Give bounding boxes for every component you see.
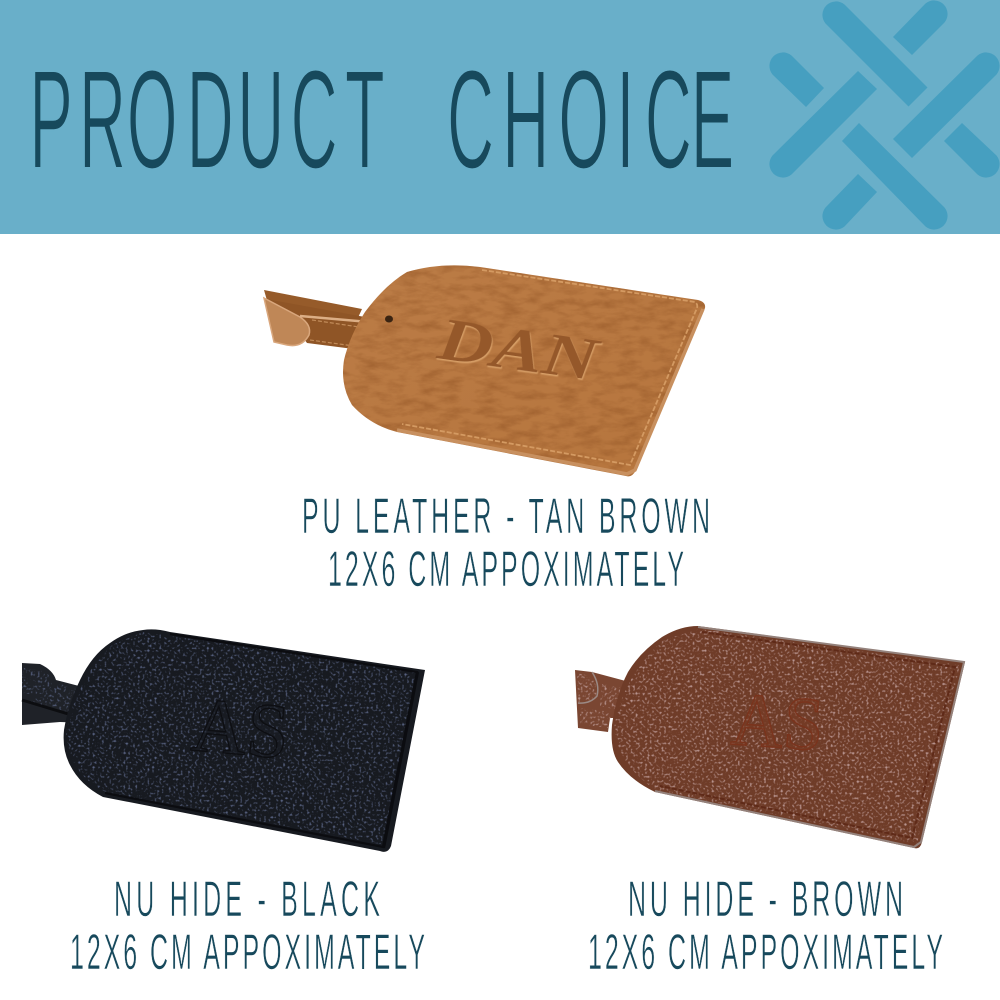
embossed initials AS: AS bbox=[729, 677, 826, 767]
strap hole bbox=[385, 316, 393, 322]
caption: PU leather bbox=[302, 489, 710, 597]
strap of black tag bbox=[22, 663, 102, 725]
caption: PU leather: PU LEATHER - TAN BROWN bbox=[302, 489, 710, 544]
caption: Nu Hide black bbox=[70, 872, 425, 980]
caption: Nu Hide brown: NU HIDE - BROWN bbox=[628, 872, 903, 927]
brown tag rim and stitching bbox=[655, 627, 964, 847]
panel: Nu Hide black tag bbox=[22, 629, 425, 852]
embossed initials DAN: DAN bbox=[433, 305, 605, 394]
caption: Nu Hide brown: 12X6 CM APPOXIMATELY bbox=[588, 925, 943, 980]
caption: Nu Hide brown bbox=[588, 872, 943, 980]
brown tag body bbox=[612, 626, 965, 848]
header banner bbox=[0, 0, 1000, 234]
title: PRODUCTCHOICE bbox=[29, 42, 734, 199]
caption: Nu Hide black: 12X6 CM APPOXIMATELY bbox=[70, 925, 425, 980]
strap of brown tag bbox=[575, 670, 648, 732]
caption: PU leather: 12X6 CM APPOXIMATELY bbox=[328, 542, 684, 597]
black tag edge stitching bbox=[105, 634, 418, 848]
tan tag body bbox=[343, 265, 705, 476]
pebble texture of brown tag bbox=[614, 629, 960, 844]
black tag body bbox=[64, 629, 425, 852]
strap of tan tag bbox=[264, 290, 392, 352]
icon: woven cross logo bbox=[769, 0, 1000, 230]
tan tag stitching bbox=[402, 270, 697, 465]
pebble texture of black tag bbox=[66, 632, 418, 845]
panel: Nu Hide brown tag bbox=[575, 626, 965, 848]
caption: Nu Hide black: NU HIDE - BLACK bbox=[114, 872, 380, 927]
lower and right rim of tan tag bbox=[397, 309, 703, 474]
panel: PU leather tan tag bbox=[264, 265, 705, 476]
embossed initials AS: AS bbox=[189, 680, 293, 775]
leather grain of tan tag bbox=[343, 265, 705, 476]
